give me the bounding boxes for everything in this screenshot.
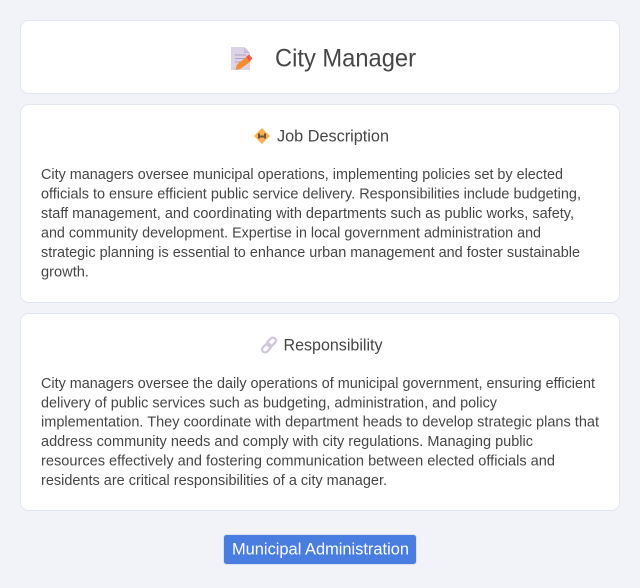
icon: orange diamond sign — [254, 128, 270, 144]
panel: title card — [20, 20, 620, 94]
responsibility text: City managers oversee the daily operations of municipal government, ensuring efficient — [41, 376, 595, 392]
job description text: and community development. Expertise in local government administration and — [41, 226, 541, 242]
title: City Manager — [275, 44, 416, 72]
job description text: growth. — [41, 264, 89, 280]
responsibility text — [41, 376, 599, 489]
heading: responsibility: Responsibility — [284, 336, 383, 354]
responsibility text: delivery of public services such as budgeting, administration, and policy — [41, 396, 498, 412]
responsibility text: residents are critical responsibilities of a city manager. — [41, 473, 387, 489]
job description text: officials to ensure efficient public service delivery. Responsibilities include budgeting, — [41, 186, 581, 202]
panel: responsibility — [20, 314, 620, 510]
heading: job description: Job Description — [277, 128, 389, 146]
job description text: strategic planning is essential to enhance urban management and foster sustainable — [41, 245, 580, 261]
icon: document with pencil — [231, 47, 252, 70]
responsibility text: implementation. They coordinate with department heads to develop strategic plans that — [41, 414, 599, 430]
job description text: staff management, and coordinating with departments such as public works, safety, — [41, 206, 574, 222]
responsibility text: address community needs and comply with city regulations. Managing public — [41, 434, 533, 450]
responsibility text: resources effectively and fostering communication between elected officials and — [41, 454, 555, 470]
icon: chain link — [261, 336, 277, 354]
job description text — [41, 167, 581, 280]
job description text: City managers oversee municipal operations, implementing policies set by elected — [41, 167, 563, 183]
tag button: municipal administration — [224, 534, 416, 564]
tag button: municipal administration: Municipal Administration — [232, 540, 409, 558]
panel: job description — [20, 104, 620, 302]
